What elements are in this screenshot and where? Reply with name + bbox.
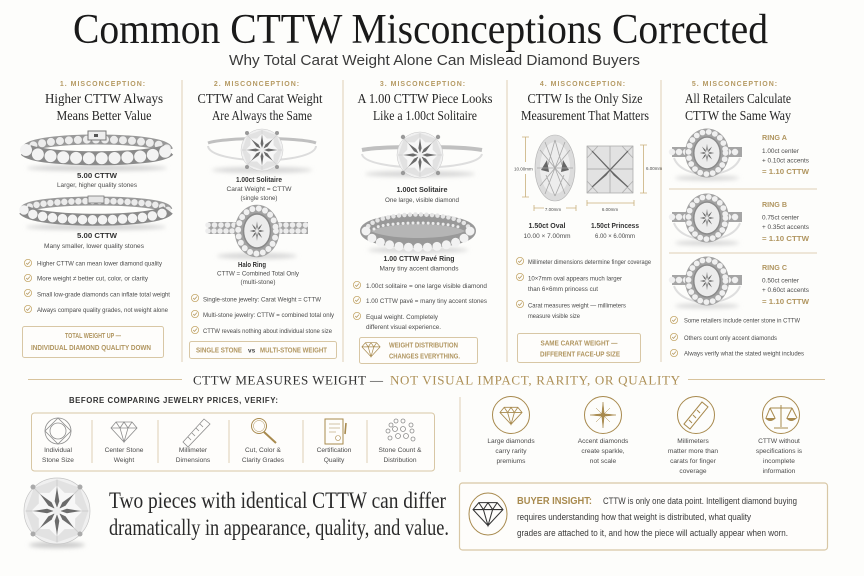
bullets 4: 10×7mm oval appears much larger — [528, 276, 623, 282]
bullets 1 — [24, 259, 170, 314]
bullets 5: Always verify what the stated weight includes — [684, 350, 805, 358]
fact: rarity — [487, 396, 535, 465]
label: millimeter: Dimensions — [176, 457, 211, 464]
ring C specs: RING C — [762, 263, 787, 272]
ring C — [672, 256, 742, 308]
fact: millimeters: coverage — [679, 468, 707, 475]
caption: larger stones: 5.00 CTTW — [77, 173, 117, 180]
callout 3 — [360, 338, 478, 364]
caption: solitaire: (single stone) — [240, 195, 278, 202]
ring B specs: 0.75ct center — [762, 214, 800, 222]
caption: pave — [380, 256, 459, 272]
heading 1: Higher CTTW Always — [45, 91, 163, 106]
caption: larger stones — [57, 173, 138, 189]
ring B specs: = 1.10 CTTW — [762, 234, 810, 243]
bullets 4: Millimeter dimensions determine finger coverage — [528, 259, 651, 266]
label: millimeter — [176, 447, 211, 464]
ring: pave eternity — [365, 214, 471, 253]
bullets 1: More weight ≠ better cut, color, or clarity — [37, 276, 149, 282]
panel: misconception 2 — [190, 81, 336, 358]
bullets 3: 1.00 CTTW pavé = many tiny accent stones — [366, 298, 488, 305]
panel: misconception 5 — [669, 81, 817, 358]
label: grades: Cut, Color & — [245, 447, 282, 454]
statement: Two pieces with identical CTTW can differ — [109, 488, 446, 513]
bracelet: smaller stones — [24, 196, 168, 230]
heading 4 — [521, 91, 649, 123]
label: certification: Certification — [317, 447, 352, 454]
callout 2: vs — [248, 348, 256, 354]
callout 4 — [518, 334, 640, 362]
fact: sparkle: create sparkle, — [581, 448, 625, 455]
ring: solitaire large — [362, 132, 482, 178]
callout 3: CHANGES EVERYTHING. — [389, 352, 460, 360]
callout: buyer insight — [460, 483, 828, 550]
fact: specifications: CTTW without — [758, 438, 800, 445]
banner: CTTW measures weight: NOT VISUAL IMPACT, RARITY, OR QUALITY — [390, 372, 681, 388]
label: stone count — [379, 447, 422, 464]
bullets 2: Single-stone jewelry: Carat Weight = CTTW — [203, 296, 322, 304]
caption: solitaire large: One large, visible diamond — [385, 197, 459, 204]
fact: millimeters: matter more than — [668, 448, 718, 455]
heading 3: A 1.00 CTTW Piece Looks — [358, 91, 492, 106]
caption: solitaire large: 1.00ct Solitaire — [396, 187, 448, 194]
insight text: grades are attached to it, and how the piece will actually appear when worn. — [517, 528, 788, 538]
ring A specs: = 1.10 CTTW — [762, 167, 810, 176]
caption: oval and princess: 1.50ct Oval — [528, 223, 566, 230]
panel: misconception 1 — [22, 81, 170, 358]
subtitle: Why Total Carat Weight Alone Can Mislead Diamond Buyers — [229, 52, 640, 69]
caption: pave: 1.00 CTTW Pavé Ring — [384, 256, 454, 263]
heading 2 — [198, 91, 323, 123]
ring C specs: 0.50ct center — [762, 278, 800, 284]
ring A specs: RING A — [762, 133, 787, 142]
diagram: princess diamond: 6.00mm — [646, 166, 663, 171]
ring A specs — [762, 133, 810, 176]
caption: halo: (multi-stone) — [240, 279, 276, 286]
callout 1 — [22, 326, 164, 358]
icon: center stone weight — [111, 422, 137, 442]
ring A specs: 1.00ct center — [762, 148, 800, 155]
caption: smaller stones: 5.00 CTTW — [77, 233, 117, 240]
label 5: 5. MISCONCEPTION: — [692, 81, 778, 88]
bullets 4 — [516, 257, 651, 320]
label: center stone weight: Center Stone — [105, 447, 144, 454]
label: grades: Clarity Grades — [242, 457, 285, 464]
label: center stone weight: Weight — [114, 457, 134, 464]
label: millimeter: Millimeter — [179, 447, 208, 454]
fact: rarity: carry rarity — [495, 448, 527, 455]
caption: oval and princess — [524, 223, 639, 240]
bullets 3: Equal weight. Completely — [366, 314, 439, 321]
label: stone count: Stone Count & — [379, 447, 422, 454]
label 1: 1. MISCONCEPTION: — [60, 81, 146, 88]
bullets 1: Higher CTTW can mean lower diamond quality — [37, 260, 163, 268]
statement: dramatically in appearance, quality, and value. — [109, 515, 449, 540]
ring C specs — [762, 263, 810, 306]
icon: diamond in circle — [469, 493, 507, 535]
caption: smaller stones: Many smaller, lower quality stones — [44, 243, 145, 250]
panel: misconception 4 — [514, 81, 663, 362]
ring A specs: + 0.10ct accents — [762, 158, 810, 164]
heading 3 — [358, 91, 492, 123]
caption: solitaire: Carat Weight = CTTW — [226, 186, 292, 193]
insight text: BUYER INSIGHT: — [517, 496, 592, 507]
insight text — [517, 496, 797, 538]
callout 1: INDIVIDUAL DIAMOND QUALITY DOWN — [31, 343, 151, 352]
icon: stone size — [45, 418, 71, 444]
label: stone size — [42, 447, 74, 464]
fact: specifications: incomplete — [763, 458, 795, 465]
bullets 4: than 6×6mm princess cut — [528, 286, 598, 293]
caption: larger stones: Larger, higher quality stones — [57, 182, 138, 189]
fact: specifications: specifications is — [756, 448, 803, 455]
icon: certificate — [325, 419, 346, 444]
label: center stone weight — [105, 447, 144, 464]
bracelet: larger stones — [26, 131, 168, 171]
callout 1: TOTAL WEIGHT UP — — [65, 331, 122, 340]
fact: millimeters: Millimeters — [677, 438, 709, 445]
icon: magnifier — [252, 418, 276, 443]
label 3: 3. MISCONCEPTION: — [380, 81, 466, 88]
caption: oval and princess: 1.50ct Princess — [591, 223, 639, 230]
diagram: oval diamond: 7.00mm — [545, 207, 561, 212]
ring A — [672, 128, 742, 180]
caption: solitaire — [226, 177, 292, 202]
caption: pave: Many tiny accent diamonds — [380, 266, 459, 272]
fact: sparkle — [578, 396, 629, 465]
image: loose round diamond — [24, 478, 90, 548]
label: certification — [317, 447, 352, 464]
ring: halo — [208, 205, 308, 259]
ring B specs — [762, 200, 810, 243]
heading 2: Are Always the Same — [212, 108, 312, 123]
icon: ruler — [183, 419, 210, 447]
fact: rarity: premiums — [497, 458, 526, 465]
bullets 5: Others count only accent diamonds — [684, 335, 778, 342]
bullets 5: Some retailers include center stone in CTTW — [684, 318, 801, 324]
bullets 1: Small low-grade diamonds can inflate total weight — [37, 292, 170, 298]
heading 4: CTTW Is the Only Size — [528, 91, 643, 106]
fact: sparkle: not scale — [590, 458, 617, 465]
caption: oval and princess: 10.00 × 7.00mm — [524, 233, 571, 240]
heading 3: Like a 1.00ct Solitaire — [373, 108, 477, 123]
fact: rarity: Large diamonds — [487, 438, 535, 445]
icon: diamond — [362, 343, 380, 357]
bullets 4: Carat measures weight — millimeters — [528, 302, 627, 310]
callout 4: SAME CARAT WEIGHT — — [540, 338, 618, 348]
insight text: CTTW is only one data point. Intelligent diamond buying — [603, 496, 797, 506]
caption: solitaire large — [385, 187, 459, 204]
heading 2: CTTW and Carat Weight — [198, 91, 323, 106]
bullets 3 — [353, 281, 488, 331]
bullets 3: different visual experience. — [366, 324, 441, 331]
heading 4: Measurement That Matters — [521, 108, 649, 123]
callout 3: WEIGHT DISTRIBUTION — [389, 340, 458, 350]
diagram: oval diamond — [514, 135, 576, 212]
caption: smaller stones — [44, 233, 145, 250]
heading 5: CTTW the Same Way — [685, 108, 791, 123]
callout 2 — [190, 342, 336, 358]
caption: halo — [217, 262, 300, 286]
bullets 1: Always compare quality grades, not weight alone — [37, 307, 168, 314]
callout 4: DIFFERENT FACE-UP SIZE — [540, 350, 620, 358]
fact: millimeters: carats for finger — [670, 458, 717, 465]
label: stone size: Individual — [44, 447, 72, 454]
bullets 2: Multi-stone jewelry: CTTW = combined total only — [203, 312, 335, 319]
banner: CTTW measures weight: CTTW MEASURES WEIGHT — — [193, 372, 384, 388]
label: certification: Quality — [324, 457, 345, 464]
label: grades — [242, 447, 285, 464]
bullets 3: 1.00ct solitaire = one large visible diamond — [366, 283, 487, 290]
bullets 4: measure visible size — [528, 313, 580, 320]
fact: millimeters — [668, 396, 718, 475]
heading 1 — [45, 91, 163, 123]
caption: solitaire: 1.00ct Solitaire — [236, 177, 282, 184]
insight text: requires understanding how that weight is distributed, what quality — [517, 512, 752, 522]
heading 5 — [685, 91, 791, 123]
ring B specs: RING B — [762, 200, 787, 209]
ring C specs: + 0.60ct accents — [762, 287, 810, 294]
ring: solitaire — [208, 129, 316, 173]
label: stone size: Stone Size — [42, 457, 74, 464]
icon: stones cluster — [386, 419, 415, 441]
label 2: 2. MISCONCEPTION: — [214, 81, 300, 88]
ring B specs: + 0.35ct accents — [762, 224, 810, 231]
diagram: oval diamond: 10.00mm — [514, 166, 533, 172]
ring C specs: = 1.10 CTTW — [762, 297, 810, 306]
bullets 2: CTTW reveals nothing about individual stone size — [203, 328, 332, 335]
banner: CTTW measures weight — [28, 372, 825, 388]
heading: before comparing: BEFORE COMPARING JEWELRY PRICES, VERIFY: — [69, 396, 278, 405]
heading 1: Means Better Value — [56, 108, 152, 123]
fact: specifications: information — [763, 468, 796, 475]
fact: sparkle: Accent diamonds — [578, 438, 629, 445]
callout 2: SINGLE STONE — [196, 346, 242, 354]
panel: misconception 3 — [353, 81, 492, 364]
fact: specifications — [756, 396, 803, 475]
caption: halo: Halo Ring — [238, 262, 266, 269]
callout 2: MULTI-STONE WEIGHT — [260, 346, 328, 354]
label: stone count: Distribution — [384, 457, 417, 464]
caption: halo: CTTW = Combined Total Only — [217, 270, 300, 278]
ring B — [672, 194, 742, 246]
bullets 2 — [191, 294, 335, 335]
statement — [109, 488, 449, 540]
heading 5: All Retailers Calculate — [685, 91, 791, 106]
diagram: princess diamond — [587, 145, 663, 212]
diagram: princess diamond: 6.00mm — [602, 207, 618, 212]
panel: verification checklist — [32, 413, 434, 471]
label 4: 4. MISCONCEPTION: — [540, 81, 626, 88]
icons row: key facts — [487, 396, 803, 475]
bullets 5 — [670, 316, 805, 358]
caption: oval and princess: 6.00 × 6.00mm — [595, 233, 635, 240]
title: Common CTTW Misconceptions Corrected — [73, 7, 768, 53]
